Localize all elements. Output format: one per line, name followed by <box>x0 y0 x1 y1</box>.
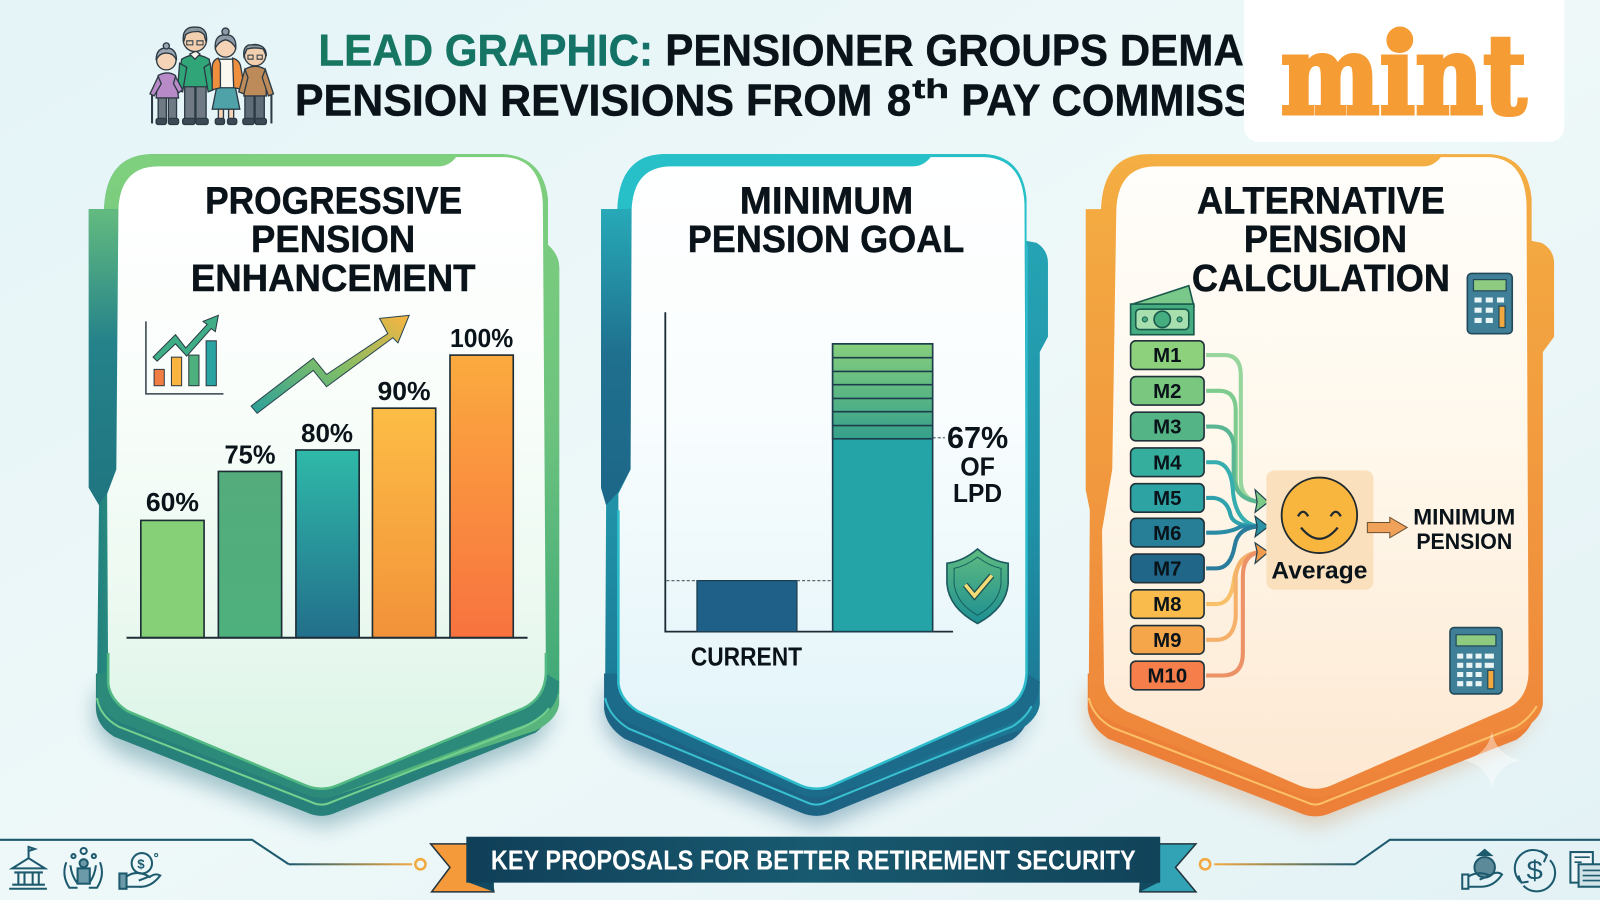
icon: hand with coin <box>119 853 160 889</box>
title line two end: PAY COMMISS <box>961 74 1252 125</box>
panel heading <box>1192 179 1450 299</box>
title lead-in: LEAD GRAPHIC: <box>318 24 653 75</box>
title line one: PENSIONER GROUPS DEMA <box>665 24 1244 75</box>
month labels: M6 <box>1153 523 1182 545</box>
bar 80% <box>296 450 359 638</box>
panel heading: PROGRESSIVE <box>205 179 462 221</box>
icon: hand with money bag <box>1462 850 1502 889</box>
bar labels: 60% <box>146 489 199 517</box>
sparkle watermark <box>1463 732 1520 789</box>
bar labels: 90% <box>378 378 431 406</box>
month labels: M7 <box>1153 559 1182 581</box>
title <box>295 24 1252 125</box>
panel heading <box>688 179 964 260</box>
panel inner card <box>618 157 1027 789</box>
month labels: M9 <box>1153 630 1182 652</box>
ribbon text: KEY PROPOSALS FOR BETTER RETIREMENT SECURITY <box>491 844 1136 875</box>
panel back layer <box>1088 673 1537 816</box>
goal value callout <box>947 421 1008 508</box>
logo <box>1244 0 1564 142</box>
panel inner card <box>107 157 546 789</box>
minimum pension label: PENSION <box>1416 529 1512 554</box>
panel heading <box>191 179 476 299</box>
panel: progressive pension enhancement <box>89 154 559 827</box>
minimum pension label <box>1413 504 1515 554</box>
header people icon <box>150 27 273 124</box>
bar labels: 100% <box>450 325 513 353</box>
panel inner card <box>1102 157 1529 789</box>
panel: minimum pension goal <box>601 154 1048 827</box>
ribbon left tail <box>431 844 494 892</box>
panel heading: ALTERNATIVE <box>1197 179 1445 221</box>
icon: calculator top <box>1467 273 1512 334</box>
ribbon band <box>466 837 1160 883</box>
title line two: PENSION REVISIONS FROM <box>295 74 872 125</box>
bar 90% <box>372 408 436 638</box>
ribbon left fold <box>466 882 494 892</box>
ribbon right fold <box>1140 882 1160 892</box>
bar 75% <box>218 471 282 638</box>
icon: cash <box>1131 286 1194 335</box>
month labels: M4 <box>1153 452 1182 474</box>
month labels: M8 <box>1153 594 1182 616</box>
mint wordmark: mint <box>1281 10 1527 139</box>
tall grandfather <box>178 27 213 124</box>
title ordinal <box>887 74 949 125</box>
month labels: M3 <box>1153 417 1182 439</box>
icon: hand with coin: $ <box>137 856 145 871</box>
connector arrowheads <box>1255 490 1268 563</box>
bar labels: 75% <box>224 441 276 469</box>
icon: mini growth chart <box>146 315 223 394</box>
bar labels <box>146 325 513 517</box>
icon: calculator bottom <box>1450 628 1502 694</box>
title ordinal: 8 <box>887 74 911 125</box>
panel back layer <box>96 673 551 816</box>
icon: caring hands <box>64 848 102 888</box>
bar 60% <box>141 520 204 638</box>
panel heading: ENHANCEMENT <box>191 257 476 299</box>
panel frame <box>89 154 559 797</box>
footer ribbon <box>431 837 1196 892</box>
footer right connector <box>1200 840 1600 869</box>
grandmother right <box>212 28 245 124</box>
month labels: M2 <box>1153 381 1182 403</box>
icon: bank <box>9 847 47 889</box>
icon: circular dollar: $ <box>1527 856 1543 886</box>
average tile <box>1266 470 1373 590</box>
bar 100% <box>450 355 513 638</box>
panel frame <box>1086 154 1554 797</box>
bar labels: 80% <box>301 420 353 448</box>
panel heading: MINIMUM <box>740 179 913 221</box>
goal value callout: OF <box>960 454 995 482</box>
month labels: M10 <box>1148 666 1187 688</box>
panel frame <box>601 154 1048 797</box>
chart axes <box>665 312 953 632</box>
arrow: to minimum pension <box>1367 517 1407 538</box>
current label: CURRENT <box>691 643 802 671</box>
goal value callout: 67% <box>947 421 1008 455</box>
arrow: rising trend <box>251 315 409 413</box>
icon: shield check <box>947 549 1008 623</box>
minimum pension label: MINIMUM <box>1413 504 1515 529</box>
month labels: M5 <box>1153 488 1182 510</box>
goal value callout: LPD <box>953 480 1002 508</box>
current pension bar <box>697 581 797 632</box>
grandfather right <box>239 44 273 124</box>
icon: calculator document <box>1570 852 1600 887</box>
average label: Average <box>1271 558 1367 585</box>
panel heading: PENSION <box>1244 218 1407 260</box>
ribbon right tail <box>1140 844 1196 892</box>
panel heading: PENSION GOAL <box>688 218 964 260</box>
month boxes <box>1131 341 1204 690</box>
icon: smiley <box>1282 478 1357 553</box>
panel: alternative pension calculation <box>1086 154 1554 827</box>
grandmother left <box>150 43 183 124</box>
panel back layer <box>604 673 1032 816</box>
connector lines <box>1206 355 1260 676</box>
bar chart <box>127 355 528 638</box>
goal pension bar <box>833 344 933 632</box>
panel heading: CALCULATION <box>1192 257 1450 299</box>
title ordinal: th <box>912 74 949 104</box>
icon: circular dollar <box>1515 850 1555 891</box>
footer left connector <box>0 840 426 869</box>
month labels: M1 <box>1153 345 1182 367</box>
month labels <box>1148 345 1187 688</box>
panel heading: PENSION <box>251 218 415 260</box>
